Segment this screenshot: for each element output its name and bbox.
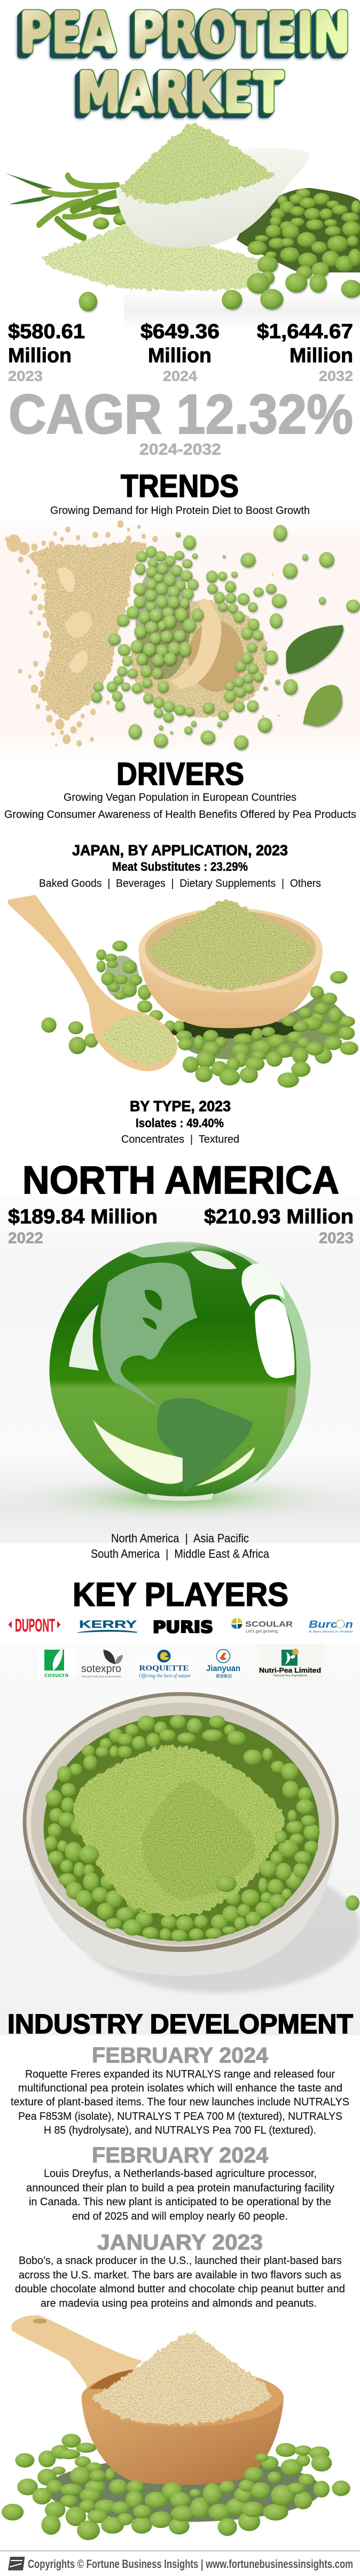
- regional value 2023: 2023: [319, 1230, 354, 1247]
- logo: DuPont: DUPONT: [15, 1615, 55, 1636]
- logo: Scoular: [231, 1618, 293, 1634]
- regional value 2022: $189.84 Million: [8, 1206, 158, 1228]
- CAGR headline: 2024-2032: [139, 441, 221, 458]
- development: January 2023 Bobo's: are madevia using pea proteins and almonds and peanuts.: [41, 2297, 317, 2309]
- development: January 2023 Bobo's: JANUARY 2023: [97, 2230, 263, 2254]
- logo: Burcon: Burcon: [309, 1619, 353, 1630]
- logo: Burcon: [308, 1619, 353, 1634]
- heading: industry development: INDUSTRY DEVELOPMENT: [7, 2009, 353, 2039]
- logo: Scoular: Let's get growing.: [246, 1629, 279, 1634]
- market value 2023: 2023: [8, 368, 43, 384]
- development: February 2024 Louis Dreyfus: Louis Dreyfus, a Netherlands-based agriculture processor,: [44, 2167, 317, 2180]
- development: February 2024 Louis Dreyfus: announced their plan to build a pea protein manufacturing facility: [26, 2182, 335, 2194]
- heading: key players: KEY PLAYERS: [73, 1576, 288, 1613]
- logo: Roquette: ROQUETTE: [139, 1664, 189, 1673]
- logo: Kerry: KERRY: [79, 1619, 137, 1630]
- logo: Roquette: Offering the best of nature: [139, 1673, 191, 1679]
- logo: Kerry: [77, 1619, 137, 1633]
- logo: Sotexpro: sotexpro: [81, 1663, 121, 1675]
- market value 2024: 2024: [163, 368, 197, 384]
- development: February 2024 Louis Dreyfus: end of 2025 and will employ nearly 60 people.: [72, 2210, 288, 2222]
- logo: Jianyuan: 健源集团: [216, 1673, 232, 1679]
- regional value 2022: 2022: [8, 1230, 43, 1247]
- logo: Sotexpro: [81, 1650, 123, 1679]
- logo: Burcon: A New World in Protein: [308, 1630, 353, 1634]
- market value 2032: [257, 321, 353, 384]
- market value 2032: Million: [289, 345, 353, 367]
- title: [19, 0, 350, 126]
- segment: by type: Concentrates | Textured: [121, 1133, 239, 1145]
- logo: Scoular: SCOULAR: [245, 1620, 293, 1629]
- market value 2023: Million: [8, 345, 72, 367]
- image: wooden scoop of powder on peas: [2, 2315, 350, 2540]
- heading: trends: TRENDS: [121, 469, 239, 504]
- development: January 2023 Bobo's: [15, 2230, 345, 2309]
- regions list: South America | Middle East & Africa: [91, 1547, 269, 1560]
- image: wooden bowl, spoon and peas: [8, 895, 358, 1088]
- logo: Jianyuan: Jianyuan: [206, 1664, 240, 1673]
- development: February 2024 Roquette: H 85 (hydrolysate), and NUTRALYS Pea 700 FL (textured).: [44, 2124, 316, 2136]
- logo: Cosucra: [37, 1648, 75, 1679]
- development: February 2024 Roquette: Roquette Freres expanded its NUTRALYS range and released four: [25, 2068, 335, 2080]
- logo: Sotexpro: Solución textil para profesionales: [81, 1675, 121, 1679]
- development: January 2023 Bobo's: across the U.S. market. The bars are available in two flavors such as: [19, 2269, 341, 2281]
- regional value 2023: $210.93 Million: [204, 1206, 354, 1228]
- driver text: [4, 791, 356, 821]
- regions list: North America | Asia Pacific: [111, 1532, 249, 1545]
- regional value 2023: [204, 1206, 354, 1247]
- development: February 2024 Roquette: Pea F853M (isolate), NUTRALYS T PEA 700 M (textured), NUTRALYS: [18, 2110, 342, 2122]
- regions list: [91, 1532, 269, 1560]
- logo: Roquette: [135, 1650, 192, 1679]
- driver text: Growing Vegan Population in European Countries: [64, 791, 296, 803]
- development: February 2024 Louis Dreyfus: in Canada. This new plant is anticipated to be operational by the: [29, 2196, 331, 2208]
- logo: Cosucra: cosucra: [44, 1672, 69, 1679]
- driver text: Growing Consumer Awareness of Health Benefits Offered by Pea Products: [4, 808, 356, 821]
- image: ceramic bowl of peas and green powder: [23, 1692, 360, 1993]
- market value 2024: Million: [148, 345, 212, 367]
- panel background: globe: [0, 1197, 360, 1543]
- logo: Nutri-Pea Limited: [257, 1644, 323, 1681]
- segment: by type: BY TYPE, 2023: [130, 1098, 231, 1114]
- heading: drivers: DRIVERS: [116, 756, 244, 792]
- segment: by type: Isolates : 49.40%: [136, 1116, 224, 1130]
- development: February 2024 Roquette: texture of plant-based items. The four new launches include NUTRALYS: [11, 2096, 349, 2108]
- logo: DuPont: [9, 1615, 61, 1636]
- title: MARKET: [77, 60, 284, 126]
- market value 2023: $580.61: [8, 321, 85, 343]
- regional value 2022: [8, 1206, 158, 1247]
- icon: green glass globe: [0, 1242, 358, 1522]
- market value 2032: $1,644.67: [257, 321, 353, 343]
- logo: Jianyuan: [206, 1650, 240, 1679]
- development: February 2024 Louis Dreyfus: [26, 2143, 335, 2222]
- development: February 2024 Louis Dreyfus: FEBRUARY 2024: [92, 2143, 268, 2167]
- segment: Japan by application: Meat Substitutes : 23.29%: [112, 860, 248, 873]
- market value 2032: 2032: [319, 368, 353, 384]
- trend text: Growing Demand for High Protein Diet to Boost Growth: [50, 505, 310, 517]
- logo: Puris: PURIS: [153, 1618, 213, 1637]
- development: February 2024 Roquette: multifunctional pea protein isolates which will enhance the taste and: [18, 2082, 342, 2094]
- development: February 2024 Roquette: [11, 2043, 349, 2136]
- hero image: powder bowl and peas: [5, 124, 360, 332]
- heading: North America: NORTH AMERICA: [22, 1159, 339, 1202]
- image: tan powder with scattered peas: [0, 520, 360, 759]
- segment: Japan by application: Baked Goods | Beverages | Dietary Supplements | Others: [39, 877, 321, 889]
- logo: Nutri-Pea Limited: Nutri-Pea Limited: [259, 1666, 321, 1674]
- development: February 2024 Roquette: FEBRUARY 2024: [92, 2043, 268, 2067]
- segment: Japan by application: JAPAN, BY APPLICATION, 2023: [72, 842, 288, 858]
- market value 2024: $649.36: [140, 321, 220, 343]
- market value 2024: [140, 321, 220, 384]
- panel background: bowl of peas: [0, 1644, 360, 2035]
- icon: Fortune Business Insights logo: [8, 2557, 25, 2571]
- segment: Japan by application: [39, 842, 321, 889]
- market value 2023: [8, 321, 85, 384]
- development: January 2023 Bobo's: Bobo’s, a snack producer in the U.S., launched their plant-based bars: [19, 2254, 342, 2267]
- segment: by type: [121, 1098, 239, 1145]
- logo: Nutri-Pea Limited: Natural Pea Ingredients: [273, 1674, 307, 1677]
- development: January 2023 Bobo's: double chocolate almond butter and chocolate chip peanut butter and: [15, 2283, 345, 2295]
